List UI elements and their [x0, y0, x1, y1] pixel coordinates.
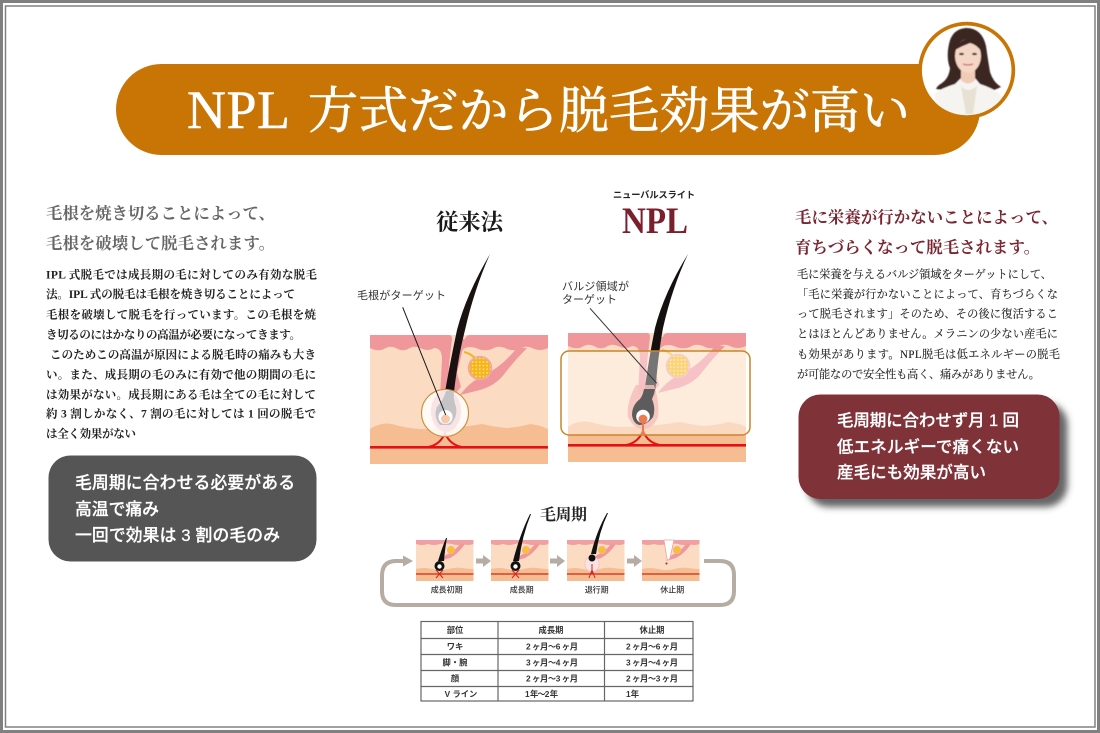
portrait icon: doctor	[918, 22, 1015, 122]
hair shaft	[644, 254, 688, 395]
left body text: このためこの高温が原因による脱毛時の痛みも大き	[50, 348, 316, 362]
table: hair cycle durations by body part: 成長期	[539, 625, 563, 635]
left body text: IPL 式脱毛では成長期の毛に対してのみ有効な脱毛	[46, 268, 318, 282]
left body text: 約 3 割しかなく、7 割の毛に対しては 1 回の脱毛で	[46, 406, 316, 420]
diagram: conventional hair root target	[370, 254, 548, 464]
table: hair cycle durations by body part: 部位	[447, 625, 464, 635]
target band	[561, 351, 750, 435]
table: hair cycle durations by body part: 脚・腕	[443, 658, 468, 668]
cycle label: resting: 休止期	[660, 584, 684, 594]
table: hair cycle durations by body part: V ライン	[445, 689, 477, 699]
table: hair cycle durations by body part: 2 ヶ月〜3 ヶ月	[526, 674, 578, 684]
table: hair cycle durations by body part: 休止期	[640, 625, 664, 635]
cycle panel: regression	[567, 513, 624, 581]
cycle panel: growth	[491, 514, 548, 581]
right heading: 毛に栄養が行かないことによって、	[795, 208, 1058, 227]
right heading: 育ちづらくなって脱毛されます。	[795, 238, 1040, 257]
arrow	[627, 555, 642, 567]
table: hair cycle durations by body part: ワキ	[447, 642, 463, 652]
label: hair root target: 毛根がターゲット	[357, 288, 446, 302]
right callout	[798, 394, 1060, 499]
right heading	[795, 208, 1058, 257]
target circle	[422, 390, 468, 436]
label: bulge region target	[562, 279, 629, 306]
left callout: 毛周期に合わせる必要がある	[75, 472, 295, 492]
left body text: い。また、成長期の毛のみに有効で他の期間の毛に	[46, 368, 316, 382]
arrow	[550, 555, 565, 567]
right callout: 低エネルギーで痛くない	[837, 438, 1019, 456]
left body text	[46, 268, 318, 440]
table: hair cycle durations by body part: 顔	[451, 674, 460, 684]
left body text: 毛根を破壊して脱毛を行っています。この毛根を焼	[46, 308, 316, 322]
diagram: NPL bulge region target	[561, 254, 750, 462]
right body text	[797, 267, 1060, 381]
cycle label: growth: 成長期	[510, 584, 534, 594]
table: hair cycle durations by body part: 1 年	[626, 689, 639, 699]
heading: conventional method: 従来法	[436, 210, 505, 235]
table: hair cycle durations by body part: 2 ヶ月〜6 ヶ月	[526, 642, 578, 652]
title banner: 方式だから脱毛効果が高い	[308, 83, 910, 139]
pointer line: bulge region	[590, 308, 657, 383]
heading: NPL	[613, 190, 695, 241]
left callout: 一回で効果は 3 割の毛のみ	[75, 526, 280, 545]
right body text: って脱毛されます」そのため、その後に復活するこ	[797, 308, 1058, 320]
hair cycle loop arrow	[382, 561, 734, 605]
left body text: は効果がない。成長期にある毛は全ての毛に対して	[46, 388, 316, 402]
table: hair cycle durations by body part: 3 ヶ月〜4 ヶ月	[526, 658, 578, 668]
right callout: 毛周期に合わせず月 1 回	[837, 411, 1019, 430]
cycle panel: early growth	[416, 538, 474, 581]
table: hair cycle durations by body part: 2 ヶ月〜3 ヶ月	[626, 674, 678, 684]
heading: NPL: NPL	[622, 200, 688, 241]
arrow	[476, 555, 491, 567]
left heading	[46, 204, 275, 253]
title banner: NPL	[187, 80, 290, 140]
table: hair cycle durations by body part: 1 年〜2 年	[525, 689, 558, 699]
pointer line: hair root	[403, 307, 446, 415]
left body text: は全く効果がない	[46, 426, 136, 440]
right body text: 「毛に栄養が行かないことによって、育ちづらくな	[797, 287, 1058, 301]
right body text: が可能なので安全性も高く、痛みがありません。	[797, 367, 1040, 381]
right body text: とはほとんどありません。メラニンの少ない産毛に	[797, 326, 1058, 340]
right body text: も効果があります。NPL脱毛は低エネルギーの脱毛	[797, 347, 1060, 361]
cycle label: early growth: 成長初期	[431, 584, 463, 594]
left callout: 高温で痛み	[75, 500, 159, 519]
left body text: 法。IPL 式の脱毛は毛根を焼き切ることによって	[46, 287, 295, 301]
left heading: 毛根を破壊して脱毛されます。	[46, 234, 275, 253]
right body text: 毛に栄養を与えるバルジ領域をターゲットにして、	[797, 267, 1052, 281]
label: bulge region target: バルジ領域が	[562, 279, 629, 293]
heading: NPL: ニューバルスライト	[613, 190, 695, 200]
right callout: 産毛にも効果が高い	[837, 462, 986, 482]
left callout	[48, 456, 316, 562]
title banner	[116, 64, 980, 155]
label: bulge region target: ターゲット	[562, 293, 617, 306]
hair bulb	[628, 385, 658, 434]
cycle panel: resting	[642, 540, 700, 581]
hair cycle heading: 毛周期	[540, 506, 587, 524]
table: hair cycle durations by body part	[421, 622, 693, 701]
left body text: き切るのにはかなりの高温が必要になってきます。	[46, 328, 301, 342]
faded hair root	[431, 390, 461, 432]
cycle label: regression: 退行期	[585, 584, 609, 594]
hair shaft	[445, 254, 490, 392]
loop arrow head	[403, 556, 413, 566]
table: hair cycle durations by body part: 2 ヶ月〜6 ヶ月	[626, 642, 678, 652]
left heading: 毛根を焼き切ることによって、	[46, 204, 275, 223]
table: hair cycle durations by body part: 3 ヶ月〜4 ヶ月	[626, 658, 678, 668]
